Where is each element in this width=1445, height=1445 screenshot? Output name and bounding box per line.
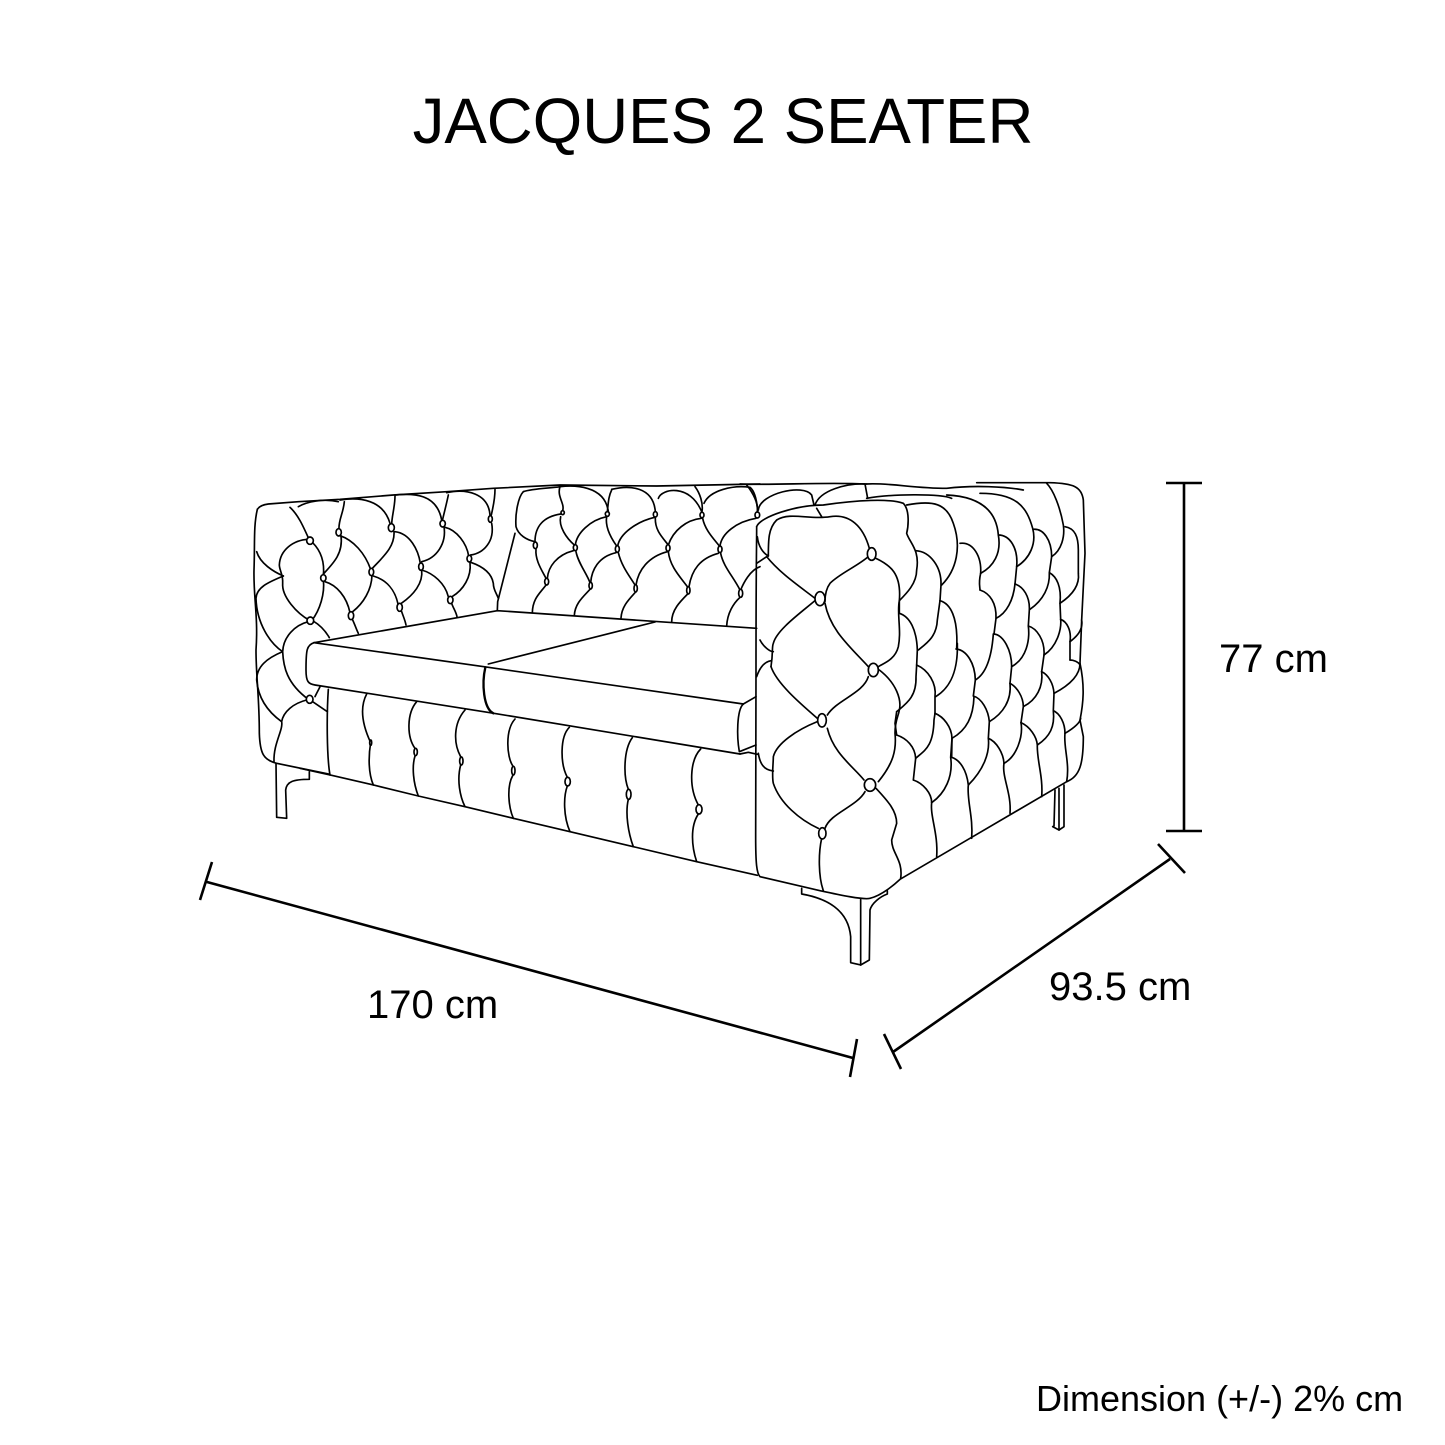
dimension: depth 93.5 cm: 93.5 cm [1049,965,1191,1009]
dimension: depth 93.5 cm [884,844,1191,1069]
dimension: width 170 cm: 170 cm [367,983,498,1027]
right arm front and side [740,483,1085,965]
dimension: height 77 cm: 77 cm [1219,637,1328,681]
illustration: tufted sofa line drawing [254,483,1085,965]
dimension: width 170 cm [200,862,857,1077]
seat cushions [306,611,757,754]
front rail with buttons [300,689,757,875]
dimension: height 77 cm [1166,483,1328,831]
title: JACQUES 2 SEATER [413,86,1033,157]
tolerance note: Dimension (+/-) 2% cm [1036,1378,1403,1419]
sofa back and left arm [254,484,760,818]
